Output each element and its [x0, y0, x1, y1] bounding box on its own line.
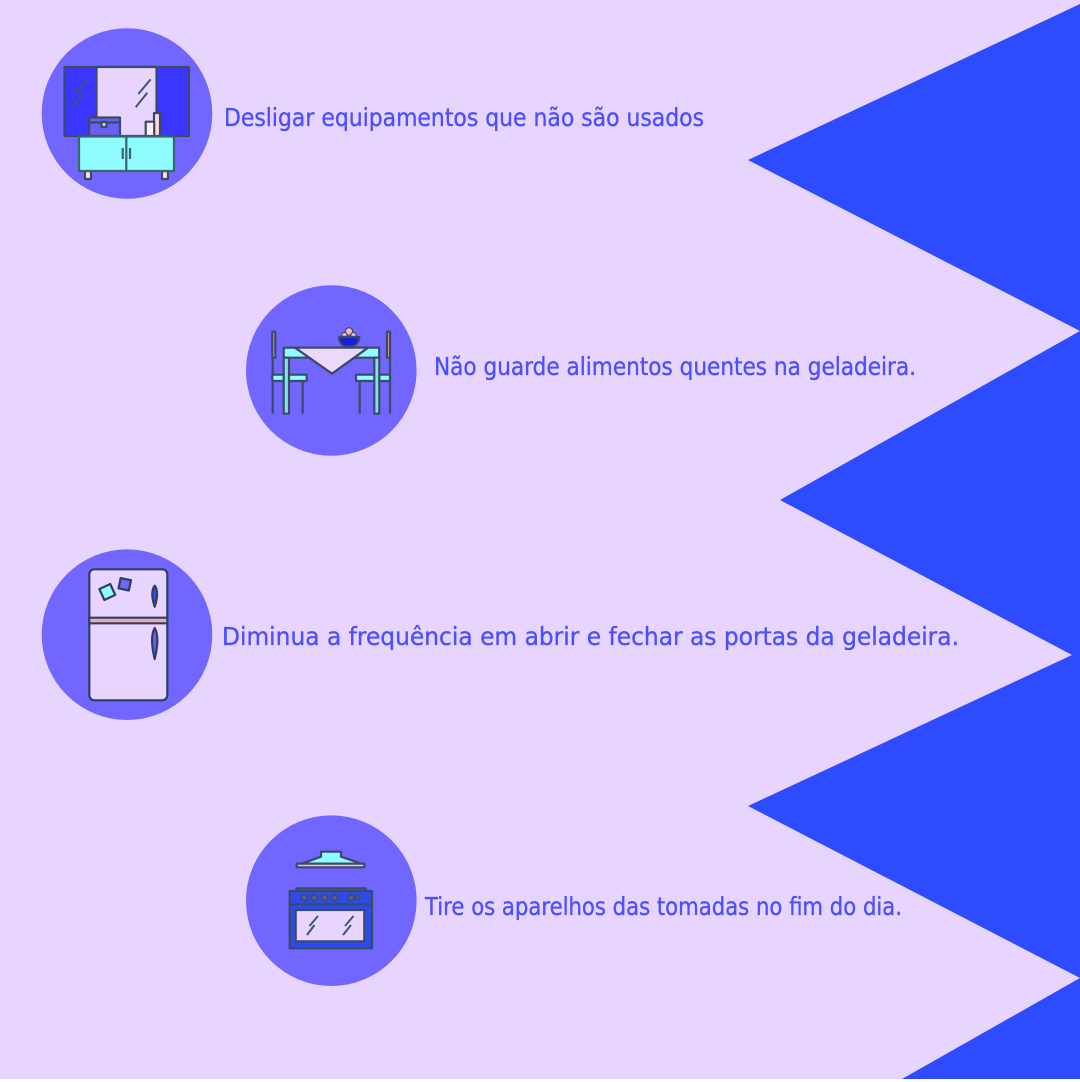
icon: refrigerator	[89, 569, 167, 700]
icon circle 3	[42, 549, 212, 720]
panel: tip 2	[246, 285, 916, 456]
icon circle 2	[246, 285, 417, 456]
panel: tip 4	[246, 815, 902, 986]
zigzag blue shape	[748, 4, 1080, 1079]
icon: range hood	[297, 852, 364, 867]
tip 4 text: Tire os aparelhos das tomadas no fim do dia.	[424, 892, 902, 921]
panel: tip 3	[42, 549, 959, 720]
icon: stove and oven	[290, 888, 372, 948]
icon: bathroom cabinet	[64, 67, 189, 179]
tip 1 text: Desligar equipamentos que não são usados	[224, 103, 704, 132]
icon: dining table	[272, 328, 390, 414]
panel: tip 1	[42, 28, 704, 199]
tip 3 text: Diminua a frequência em abrir e fechar as portas da geladeira.	[222, 622, 959, 651]
tip 2 text: Não guarde alimentos quentes na geladeira.	[434, 352, 916, 381]
icon circle 4	[246, 815, 417, 986]
icon circle 1	[42, 28, 212, 199]
